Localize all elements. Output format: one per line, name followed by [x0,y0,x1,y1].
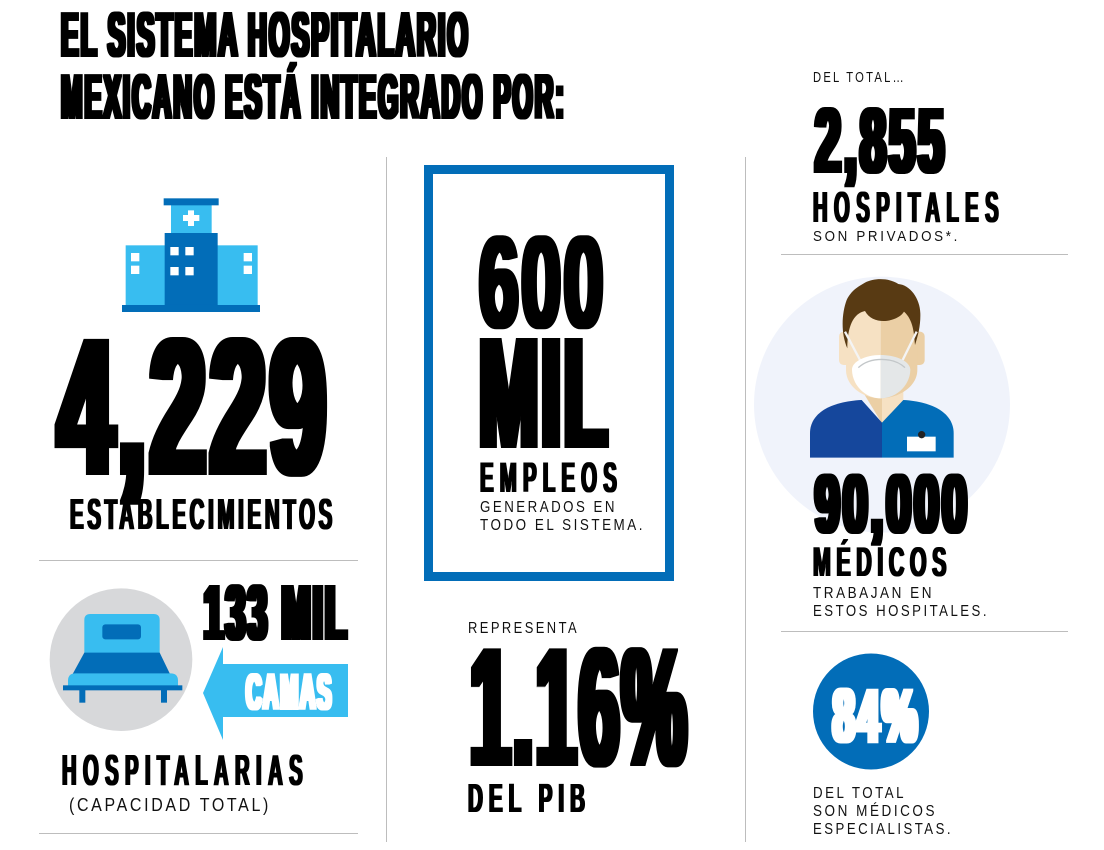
text: ESTABLECIMIENTOS [70,490,336,539]
description: empleos: GENERADOS EN [480,499,617,516]
description: especialistas [813,785,953,838]
description: especialistas: SON MÉDICOS [813,801,937,820]
panel: médicos [754,277,1010,620]
label: del pib: DEL PIB [468,775,591,821]
badge: 84%: 84% [833,674,920,759]
panel: establecimientos [58,198,336,539]
number: 90,000: 90,000 [815,457,970,550]
text: 133 MIL [204,570,349,656]
label: del total: DEL TOTAL… [813,69,906,86]
panel: especialistas [813,654,953,838]
description: trabajan: ESTOS HOSPITALES. [813,603,989,620]
description: especialistas: ESPECIALISTAS. [813,821,953,838]
number: 4,229: 4,229 [58,299,330,514]
label: representa: REPRESENTA [468,620,579,637]
badge: 84% [813,654,929,770]
description: empleos [480,499,645,534]
panel: hospitales privados [813,69,1005,245]
description: especialistas: DEL TOTAL [813,785,906,802]
label: médicos: MÉDICOS [813,538,952,585]
icon: doctor [754,277,1010,533]
icon: bed [50,588,192,731]
description: son privados: SON PRIVADOS*. [813,228,960,245]
panel: camas [50,570,349,815]
icon: hospital [122,198,260,312]
frame [428,170,670,576]
panel: camas: HOSPITALARIAS [62,746,309,795]
note: capacidad total: (CAPACIDAD TOTAL) [69,795,271,815]
panel: empleos [428,170,670,576]
description: trabajan: TRABAJAN EN [813,585,934,602]
panel: pib [468,613,689,821]
number: 2,855: 2,855 [815,90,947,192]
title [61,1,566,132]
description: empleos: TODO EL SISTEMA. [480,517,645,534]
panel: empleos: EMPLEOS [480,454,623,502]
arrow: camas: CAMAS [246,664,333,720]
number: 600: 600 [479,209,606,355]
panel: empleos: MIL [479,306,610,481]
title: EL SISTEMA HOSPITALARIO [61,1,470,70]
arrow: camas [203,647,348,740]
description: trabajan [813,585,989,620]
text: 1.16% [470,613,689,801]
